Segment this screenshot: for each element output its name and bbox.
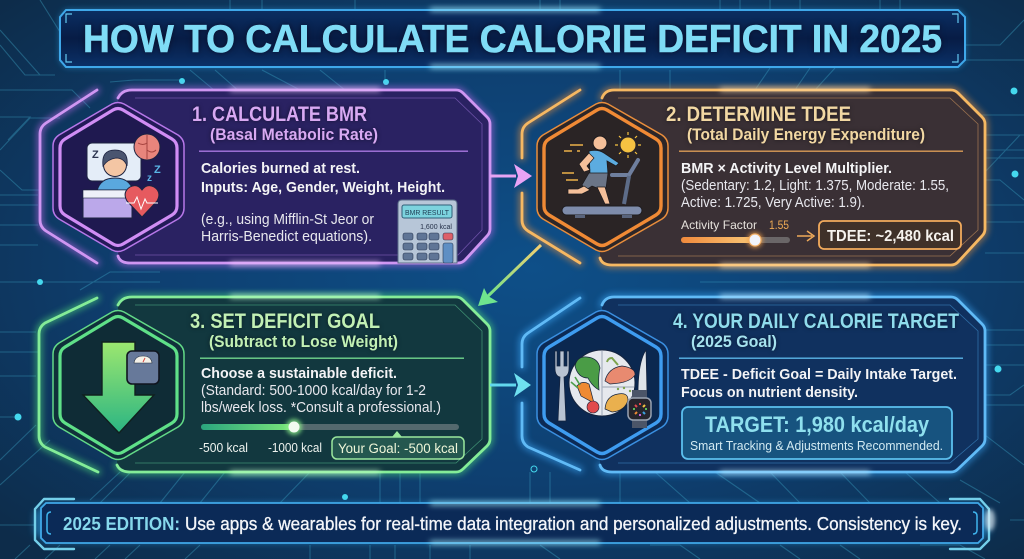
body text: Harris-Benedict equations). bbox=[201, 228, 372, 245]
arrow: step 2 to step 3 bbox=[478, 245, 541, 306]
heading: 3. SET DEFICIT GOAL bbox=[190, 310, 380, 333]
arrow to TDEE bbox=[797, 231, 814, 241]
target box: Smart Tracking & Adjustments Recommended. bbox=[690, 439, 943, 453]
goal box: Your Goal: -500 kcal bbox=[338, 441, 458, 456]
goal box bbox=[332, 431, 464, 459]
activity factor slider bbox=[681, 218, 790, 248]
activity factor slider: 1.55 bbox=[769, 218, 789, 232]
TDEE result box bbox=[819, 221, 961, 249]
heading: 2. DETERMINE TDEE bbox=[666, 103, 851, 126]
body text: Active: 1.725, Very Active: 1.9). bbox=[681, 194, 865, 211]
body text bbox=[681, 366, 957, 401]
panel 4: daily calorie target bbox=[522, 295, 985, 474]
body text bbox=[681, 160, 949, 211]
subheading: (2025 Goal) bbox=[691, 333, 777, 351]
body text: Focus on nutrient density. bbox=[681, 384, 858, 401]
title banner bbox=[60, 8, 965, 68]
body text bbox=[201, 160, 445, 245]
body text: (Standard: 500-1000 kcal/day for 1-2 bbox=[201, 382, 426, 399]
hexagon icon: down arrow with scale bbox=[53, 310, 184, 460]
body text: Choose a sustainable deficit. bbox=[201, 365, 397, 382]
panel 3: set deficit goal bbox=[39, 295, 490, 474]
footer banner: Use apps & wearables for real-time data integration and personalized adjustments. Consistency is key. bbox=[185, 514, 962, 534]
body text bbox=[201, 365, 441, 416]
body text: Inputs: Age, Gender, Weight, Height. bbox=[201, 179, 445, 196]
subheading: (Subtract to Lose Weight) bbox=[209, 333, 398, 351]
hexagon icon: sleeping person bbox=[53, 102, 184, 252]
heading: 4. YOUR DAILY CALORIE TARGET bbox=[673, 310, 959, 333]
panel 2: determine TDEE bbox=[522, 88, 985, 267]
subheading: (Basal Metabolic Rate) bbox=[210, 126, 378, 144]
hexagon icon: sleeping person: z bbox=[147, 173, 152, 184]
hexagon icon: sleeping person: Z bbox=[92, 149, 99, 161]
hexagon icon: sleeping person: Z bbox=[154, 164, 161, 176]
target box bbox=[682, 407, 952, 459]
footer banner bbox=[34, 499, 995, 549]
body text: TDEE - Deficit Goal = Daily Intake Target. bbox=[681, 366, 957, 383]
footer text: 2025 EDITION: bbox=[63, 514, 180, 534]
body text: BMR × Activity Level Multiplier. bbox=[681, 160, 892, 177]
arrow: step 3 to step 4 bbox=[490, 373, 531, 397]
icon: calculator: BMR RESULT bbox=[405, 208, 449, 217]
body text: (e.g., using Mifflin-St Jeor or bbox=[201, 211, 374, 228]
icon: calculator bbox=[398, 200, 457, 263]
circuit nodes bbox=[14, 78, 1018, 500]
deficit slider bbox=[199, 419, 459, 455]
hexagon icon: plate and smartwatch bbox=[537, 310, 668, 460]
panel 1: calculate BMR bbox=[40, 88, 490, 265]
hexagon icon: runner on treadmill bbox=[537, 102, 668, 252]
body text: lbs/week loss. *Consult a professional.) bbox=[201, 399, 441, 416]
title text: HOW TO CALCULATE CALORIE DEFICIT IN 2025 bbox=[83, 18, 942, 61]
deficit slider: -1000 kcal bbox=[268, 441, 322, 455]
arrow: step 1 to step 2 bbox=[490, 164, 532, 188]
activity factor slider: Activity Factor bbox=[681, 218, 757, 232]
icon: calculator: 1,600 kcal bbox=[420, 224, 452, 231]
body text: (Sedentary: 1.2, Light: 1.375, Moderate: 1.55, bbox=[681, 177, 949, 194]
heading: 1. CALCULATE BMR bbox=[192, 103, 367, 126]
TDEE result box: TDEE: ~2,480 kcal bbox=[827, 228, 954, 245]
body text: Calories burned at rest. bbox=[201, 160, 360, 177]
subheading: (Total Daily Energy Expenditure) bbox=[687, 126, 925, 144]
target box: TARGET: 1,980 kcal/day bbox=[705, 412, 930, 437]
deficit slider: -500 kcal bbox=[199, 441, 248, 455]
